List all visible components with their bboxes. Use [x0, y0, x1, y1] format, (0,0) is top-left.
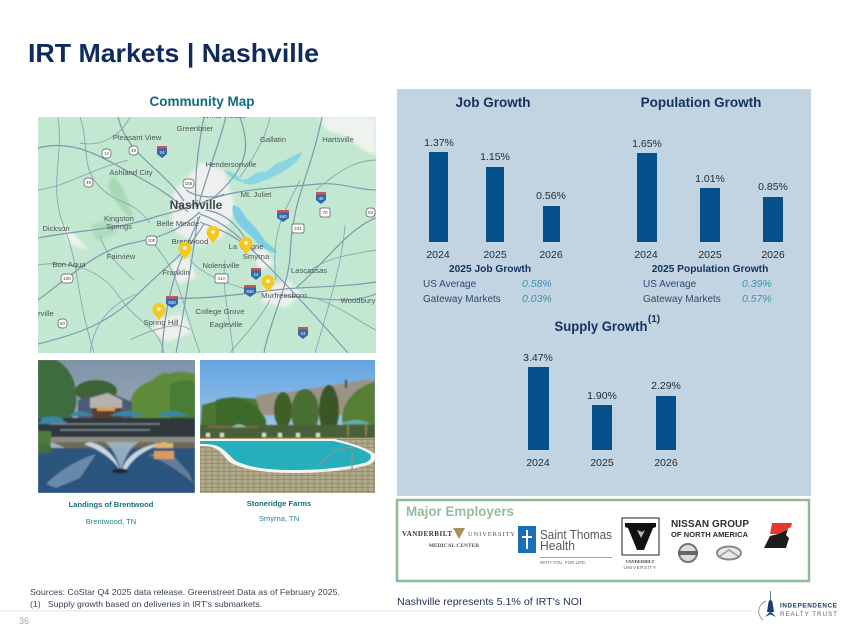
community map: 840 — [279, 214, 287, 219]
heading: population growth: Population Growth — [641, 95, 761, 110]
bar chart: supply growth: 1.90% — [587, 390, 617, 402]
community map: Smyrna — [243, 252, 270, 261]
bar chart: population growth — [632, 138, 788, 261]
heading: community map: Community Map — [150, 94, 254, 109]
community map: Woodbury — [341, 296, 376, 305]
stats: 2025 population growth: 0.57% — [742, 293, 772, 305]
logo: Vanderbilt University: VANDERBILT — [625, 559, 655, 564]
logo: Vanderbilt University Medical Center: MEDICAL CENTER — [429, 543, 480, 549]
heading: supply growth: Supply Growth — [554, 319, 648, 334]
bar chart: population growth: 2024 — [634, 249, 658, 261]
logo: Bridgestone — [764, 523, 792, 548]
sources footnote — [30, 587, 340, 609]
community map: 840 — [168, 300, 176, 305]
community map: Mt. Juliet — [241, 190, 272, 199]
bar chart: supply growth: 2.29% — [651, 380, 681, 392]
community map: Spring Hill — [143, 318, 179, 327]
community map: Gallatin — [260, 135, 286, 144]
community map: Nashville — [170, 198, 223, 212]
community map: 24 — [254, 272, 259, 277]
logo: Independence Realty Trust: INDEPENDENCE — [780, 602, 837, 610]
community map: Franklin — [162, 268, 190, 277]
stats: 2025 population growth: US Average — [643, 279, 697, 290]
bar chart: population growth: 2025 — [698, 249, 722, 261]
community map: Lascassas — [291, 266, 327, 275]
stats: 2025 job growth: US Average — [423, 279, 477, 290]
community map: Nolensville — [202, 261, 240, 270]
logo: Vanderbilt University: UNIVERSITY — [623, 565, 657, 570]
community map: Hendersonville — [206, 160, 256, 169]
logo: Saint Thomas Health: Saint Thomas — [540, 528, 612, 542]
stats: 2025 job growth — [423, 264, 552, 305]
title: IRT Markets | Nashville — [28, 38, 319, 68]
community map: Murfreesboro — [261, 291, 307, 300]
stats: 2025 population growth: 2025 Population Growth — [652, 264, 768, 275]
bar chart: job growth: 2025 — [483, 249, 507, 261]
logo: Vanderbilt University Medical Center: UNIVERSITY — [468, 531, 515, 538]
sources footnote: (1) Supply growth based on deliveries in IRT's submarkets. — [30, 599, 262, 609]
heading: major employers: Major Employers — [406, 504, 514, 519]
logo: Vanderbilt University Medical Center — [402, 528, 515, 549]
community map: 12 — [104, 151, 109, 156]
map labels: Pleasant View — [113, 133, 162, 142]
community map: 231 — [294, 226, 302, 231]
bar chart: population growth: 0.85% — [758, 181, 788, 193]
map pins — [206, 226, 220, 244]
stats: 2025 job growth: 2025 Job Growth — [449, 264, 531, 275]
community map: 24 — [160, 150, 165, 155]
bar chart: supply growth: 2025 — [590, 457, 614, 469]
community map: 49 — [86, 180, 91, 185]
route shields — [102, 149, 111, 158]
logo: Nissan Group of North America — [671, 519, 749, 562]
community map: Greenbrier — [177, 124, 214, 133]
bar chart: supply growth: 2024 — [526, 457, 550, 469]
stats: 2025 job growth: 0.03% — [522, 293, 552, 305]
caption: Landings of Brentwood: Landings of Brentwood — [69, 500, 154, 509]
community map: 70 — [322, 210, 328, 215]
bar chart: job growth: 0.56% — [536, 190, 566, 202]
heading: supply growth: (1) — [648, 314, 660, 325]
community map: Brentwood — [172, 237, 208, 246]
bar chart: job growth: 1.15% — [480, 151, 510, 163]
caption: Stoneridge Farms — [247, 499, 311, 523]
caption: Stoneridge Farms: Stoneridge Farms — [247, 499, 311, 508]
community map: 40 — [319, 196, 324, 201]
logo: Vanderbilt University Medical Center: VANDERBILT — [402, 530, 452, 538]
community map: 155 — [185, 181, 193, 186]
page number: 36 — [19, 616, 29, 626]
stats: 2025 population growth — [643, 264, 772, 305]
note: NOI share: Nashville represents 5.1% of IRT's NOI — [397, 596, 582, 608]
bar chart: population growth: 1.65% — [632, 138, 662, 150]
bar chart: job growth: 2024 — [426, 249, 450, 261]
logo: Saint Thomas Health: WITH YOU. FOR LIFE. — [540, 560, 586, 565]
community map: White House — [202, 111, 246, 120]
community map: Kingston — [104, 214, 134, 223]
logo: Nissan Group of North America: NISSAN GROUP — [671, 519, 749, 530]
stats: 2025 job growth: Gateway Markets — [423, 294, 501, 305]
photo: Stoneridge Farms — [200, 360, 375, 493]
panel: growth charts — [397, 89, 811, 496]
stats: 2025 population growth: Gateway Markets — [643, 294, 721, 305]
bar chart: supply growth: 3.47% — [523, 352, 553, 364]
stats: 2025 population growth: 0.39% — [742, 278, 772, 290]
logo: Vanderbilt University — [622, 518, 659, 570]
community map: 49 — [131, 148, 136, 153]
community map: Ashland City — [109, 168, 153, 177]
bar chart: job growth — [424, 137, 566, 261]
logo: Saint Thomas Health: Health — [540, 539, 575, 553]
community map: Belle Meade — [157, 219, 199, 228]
community map: 50 — [60, 321, 65, 326]
community map: 100 — [63, 276, 71, 281]
community map: Fairview — [107, 252, 136, 261]
community map: La Vergne — [228, 242, 264, 251]
community map: Eagleville — [210, 320, 242, 329]
community map: Dickson — [42, 224, 70, 233]
caption: Stoneridge Farms: Smyrna, TN — [259, 514, 299, 523]
heading: supply growth — [554, 314, 660, 334]
bar chart: population growth: 2026 — [761, 249, 785, 261]
community map: Bon Aqua — [52, 260, 86, 269]
community map: 100 — [148, 238, 156, 243]
photo: Landings of Brentwood — [38, 360, 195, 493]
panel: major employers — [397, 500, 809, 581]
bar chart: supply growth — [523, 352, 681, 469]
stats: 2025 job growth: 0.58% — [522, 278, 552, 290]
logo: Saint Thomas Health — [518, 526, 612, 565]
community map: Springs — [106, 222, 132, 231]
bar chart: job growth: 2026 — [539, 249, 563, 261]
community map — [38, 111, 376, 353]
bar chart: population growth: 1.01% — [695, 173, 725, 185]
caption: Landings of Brentwood — [69, 500, 154, 526]
caption: Landings of Brentwood: Brentwood, TN — [86, 517, 136, 526]
sources footnote: Sources: CoStar Q4 2025 data release. Greenstreet Data as of February 2025. — [30, 587, 340, 597]
logo: Nissan Group of North America: OF NORTH AMERICA — [671, 530, 749, 539]
community map: 41A — [217, 276, 227, 281]
logo: Independence Realty Trust — [759, 591, 837, 620]
heading: job growth: Job Growth — [456, 95, 530, 110]
bar chart: supply growth: 2026 — [654, 457, 678, 469]
community map: rville — [38, 309, 54, 318]
logo: Independence Realty Trust: REALTY TRUST — [780, 611, 837, 618]
bar chart: job growth: 1.37% — [424, 137, 454, 149]
community map: 24 — [301, 331, 306, 336]
community map: 840 — [246, 289, 254, 294]
community map: 53 — [368, 210, 373, 215]
community map: College Grove — [195, 307, 245, 316]
community map: Hartsville — [322, 135, 354, 144]
